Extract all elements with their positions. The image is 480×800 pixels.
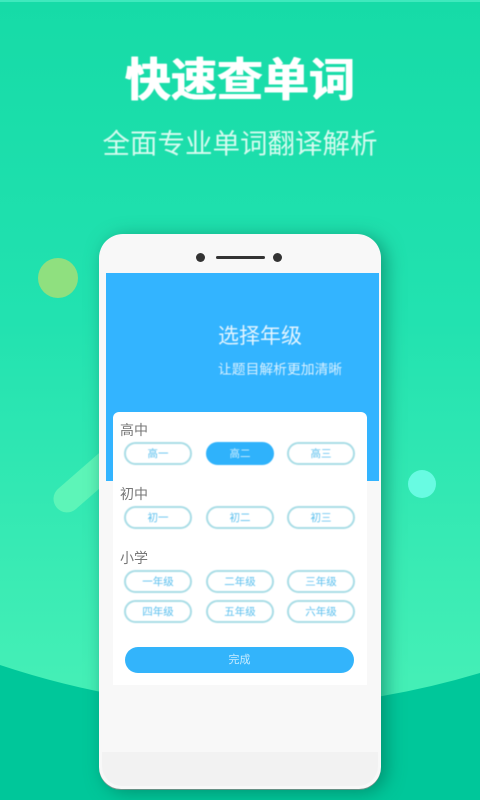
done button <box>125 647 354 673</box>
phone speaker and camera <box>196 253 282 262</box>
decorative circle: cyan <box>408 470 436 498</box>
phone <box>99 234 381 789</box>
pill 二年级 <box>206 570 274 593</box>
pill 五年级 <box>206 600 274 623</box>
pill 高三 <box>287 442 355 465</box>
pill 一年级 <box>124 570 192 593</box>
done button: 完成 <box>228 654 250 666</box>
pill 四年级 <box>124 600 192 623</box>
pill 高一 <box>124 442 192 465</box>
label: primary school: 小学 <box>120 550 148 566</box>
decorative circle: lime <box>38 258 78 298</box>
screen heading: 选择年级 <box>218 325 302 348</box>
speaker <box>216 256 265 259</box>
blue screen header <box>106 273 379 481</box>
pill 一年级: 一年级 <box>142 576 174 588</box>
pill 六年级 <box>287 600 355 623</box>
grade card <box>113 412 367 685</box>
decorative bar <box>48 445 126 518</box>
camera left <box>196 253 205 262</box>
pill 高三: 高三 <box>310 448 332 460</box>
title: 快速查单词 <box>125 54 355 106</box>
pill 初二: 初二 <box>230 512 250 524</box>
pill 四年级: 四年级 <box>142 606 174 618</box>
subtitle: 全面专业单词翻译解析 <box>102 128 378 159</box>
pill 初二 <box>206 506 274 529</box>
label: middle school: 初中 <box>120 486 148 502</box>
pill 初三: 初三 <box>310 512 332 524</box>
pill 高二 selected <box>206 442 274 465</box>
pill 三年级 <box>287 570 355 593</box>
pill 初三 <box>287 506 355 529</box>
camera right <box>273 253 282 262</box>
pill 高二 selected: 高二 <box>230 448 250 460</box>
pill 高一: 高一 <box>148 448 168 460</box>
label: high school: 高中 <box>120 422 148 438</box>
pill 三年级: 三年级 <box>305 576 337 588</box>
pill 二年级: 二年级 <box>224 576 256 588</box>
pill 五年级: 五年级 <box>224 606 256 618</box>
screen subheading: 让题目解析更加清晰 <box>218 362 342 377</box>
pill 六年级: 六年级 <box>305 606 337 618</box>
pill 初一 <box>124 506 192 529</box>
bottom bar <box>102 752 378 786</box>
pill 初一: 初一 <box>148 512 168 524</box>
top highlight strip <box>0 0 480 2</box>
